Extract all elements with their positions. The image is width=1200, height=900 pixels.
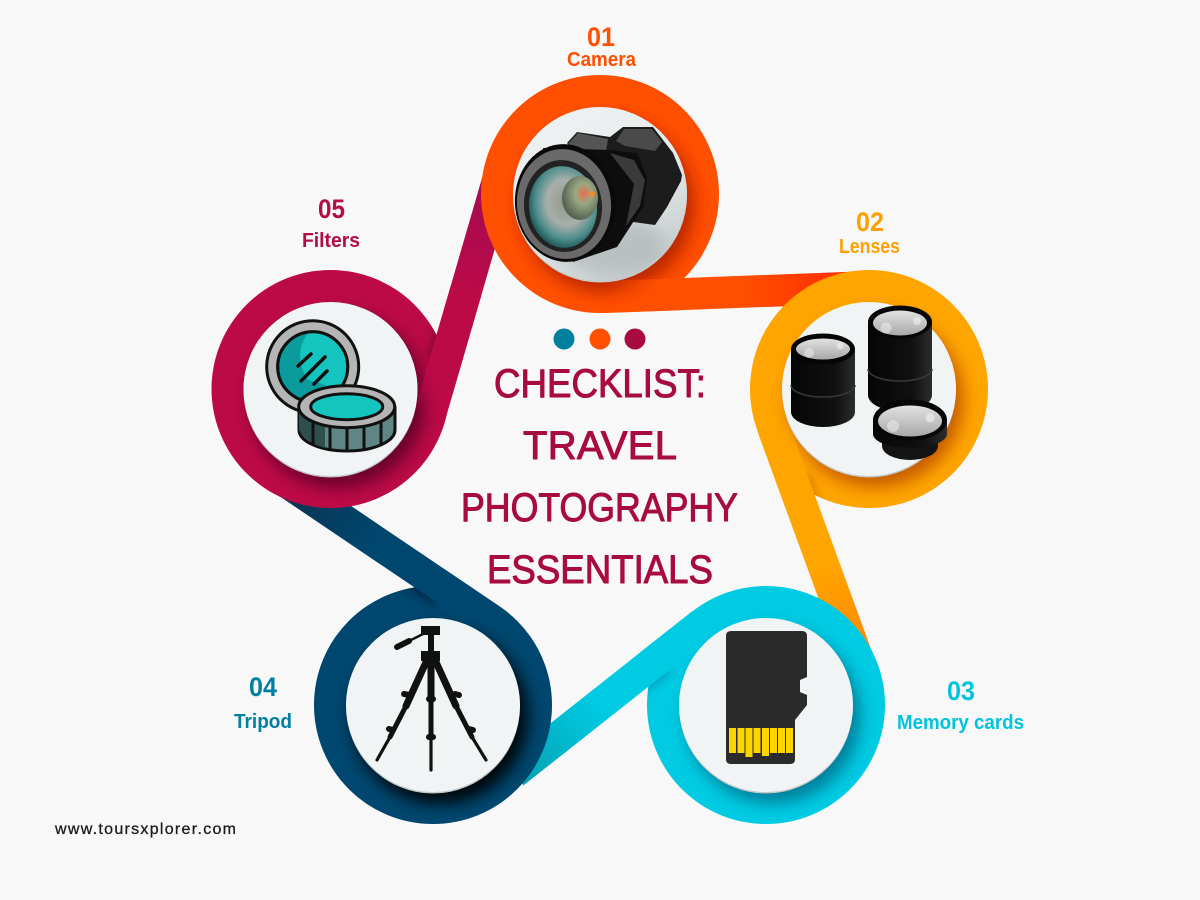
ribbon base xyxy=(604,294,680,297)
ribbon: camera to lenses xyxy=(604,288,855,297)
disc xyxy=(782,302,956,478)
icon: lenses xyxy=(791,306,947,460)
three decorative dots xyxy=(554,328,646,350)
title: PHOTOGRAPHY xyxy=(461,486,738,530)
ring shadow xyxy=(600,629,860,803)
number: 02: 02 xyxy=(856,207,884,237)
ribbon: tripod to filters xyxy=(287,482,490,619)
label: Camera: Camera xyxy=(567,49,637,71)
icon: tripod xyxy=(377,626,486,770)
title: ESSENTIALS xyxy=(487,548,713,592)
title: CHECKLIST: xyxy=(494,362,706,406)
disc xyxy=(346,618,520,794)
ring: orange xyxy=(481,75,719,313)
step 02: lenses xyxy=(750,207,988,660)
label: Filters: Filters xyxy=(302,230,360,252)
ribbon: memory cards to tripod xyxy=(514,624,702,773)
ribbon: lenses to memory cards xyxy=(772,424,858,660)
disc xyxy=(244,302,418,478)
title: TRAVEL xyxy=(523,424,677,468)
ribbon base xyxy=(650,624,702,665)
label: Lenses: Lenses xyxy=(839,236,900,258)
step 04: tripod xyxy=(234,482,552,824)
number: 01: 01 xyxy=(587,22,615,52)
icon: filters xyxy=(267,321,395,451)
ring shadow xyxy=(240,302,436,498)
ring shadow xyxy=(352,547,528,804)
ring: amber xyxy=(750,270,988,508)
number: 03: 03 xyxy=(947,676,975,706)
ribbon: filters to camera xyxy=(429,177,499,417)
title xyxy=(461,362,738,592)
ribbon base xyxy=(772,424,800,501)
website credit: www.toursxplorer.com xyxy=(54,821,236,838)
label: Tripod: Tripod xyxy=(234,711,292,733)
number: 04: 04 xyxy=(249,672,277,702)
step 01: camera xyxy=(481,22,855,313)
ring: crimson xyxy=(212,270,450,508)
icon: camera xyxy=(509,127,682,273)
disc xyxy=(679,618,853,794)
ring shadow xyxy=(780,322,972,498)
number: 05: 05 xyxy=(318,194,345,224)
ribbon base xyxy=(440,586,490,619)
disc xyxy=(513,107,687,282)
ring shadow xyxy=(520,118,694,292)
icon: memory card xyxy=(726,631,807,764)
ribbon: filters start over ring xyxy=(429,292,466,417)
step 03: memory cards xyxy=(514,586,1024,824)
label: Memory cards: Memory cards xyxy=(897,712,1024,734)
ring: navy xyxy=(314,586,552,824)
step 05: filters xyxy=(212,194,470,508)
ring: cyan xyxy=(647,586,885,824)
